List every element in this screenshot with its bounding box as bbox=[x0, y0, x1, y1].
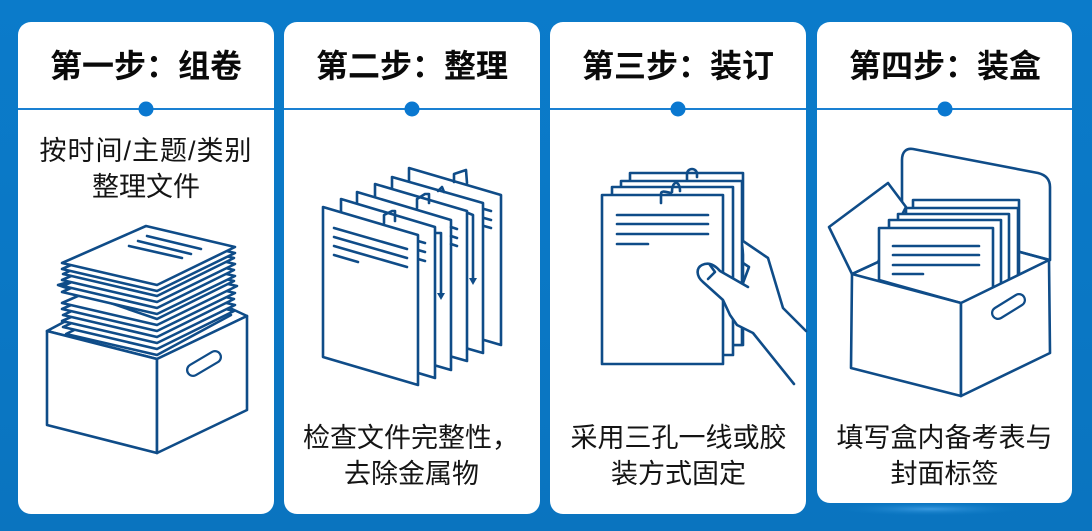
heading: step 4: 第四步：装盒 bbox=[849, 48, 1041, 84]
timeline marker: step 3 bbox=[550, 102, 806, 116]
icon: stack of papers in box bbox=[47, 226, 247, 453]
description: step 4: 封面标签 bbox=[890, 459, 998, 489]
panel: step 1 bbox=[18, 22, 274, 514]
heading: step 1: 第一步：组卷 bbox=[50, 48, 242, 84]
description: step 2: 去除金属物 bbox=[344, 459, 479, 489]
timeline marker: step 1 bbox=[18, 102, 274, 116]
description: step 4: 填写盒内备考表与 bbox=[836, 423, 1052, 453]
panel: step 2 bbox=[284, 22, 540, 514]
description: step 3: 采用三孔一线或胶 bbox=[570, 423, 786, 453]
heading: step 2: 第二步：整理 bbox=[316, 48, 508, 84]
timeline marker: step 4 bbox=[817, 102, 1072, 116]
description: step 2: 检查文件完整性， bbox=[303, 423, 519, 453]
icon: open archive box with files bbox=[829, 149, 1050, 396]
panel: step 4 bbox=[817, 22, 1072, 503]
description: step 1: 按时间/主题/类别 bbox=[39, 136, 253, 166]
description: step 3: 装方式固定 bbox=[611, 459, 746, 489]
heading: step 3: 第三步：装订 bbox=[582, 48, 774, 84]
panel: step 3 bbox=[550, 22, 806, 514]
icon: bound papers held by hand bbox=[602, 169, 806, 384]
icon: separated sheets bbox=[323, 168, 501, 385]
timeline marker: step 2 bbox=[284, 102, 540, 116]
description: step 1: 整理文件 bbox=[92, 172, 200, 202]
